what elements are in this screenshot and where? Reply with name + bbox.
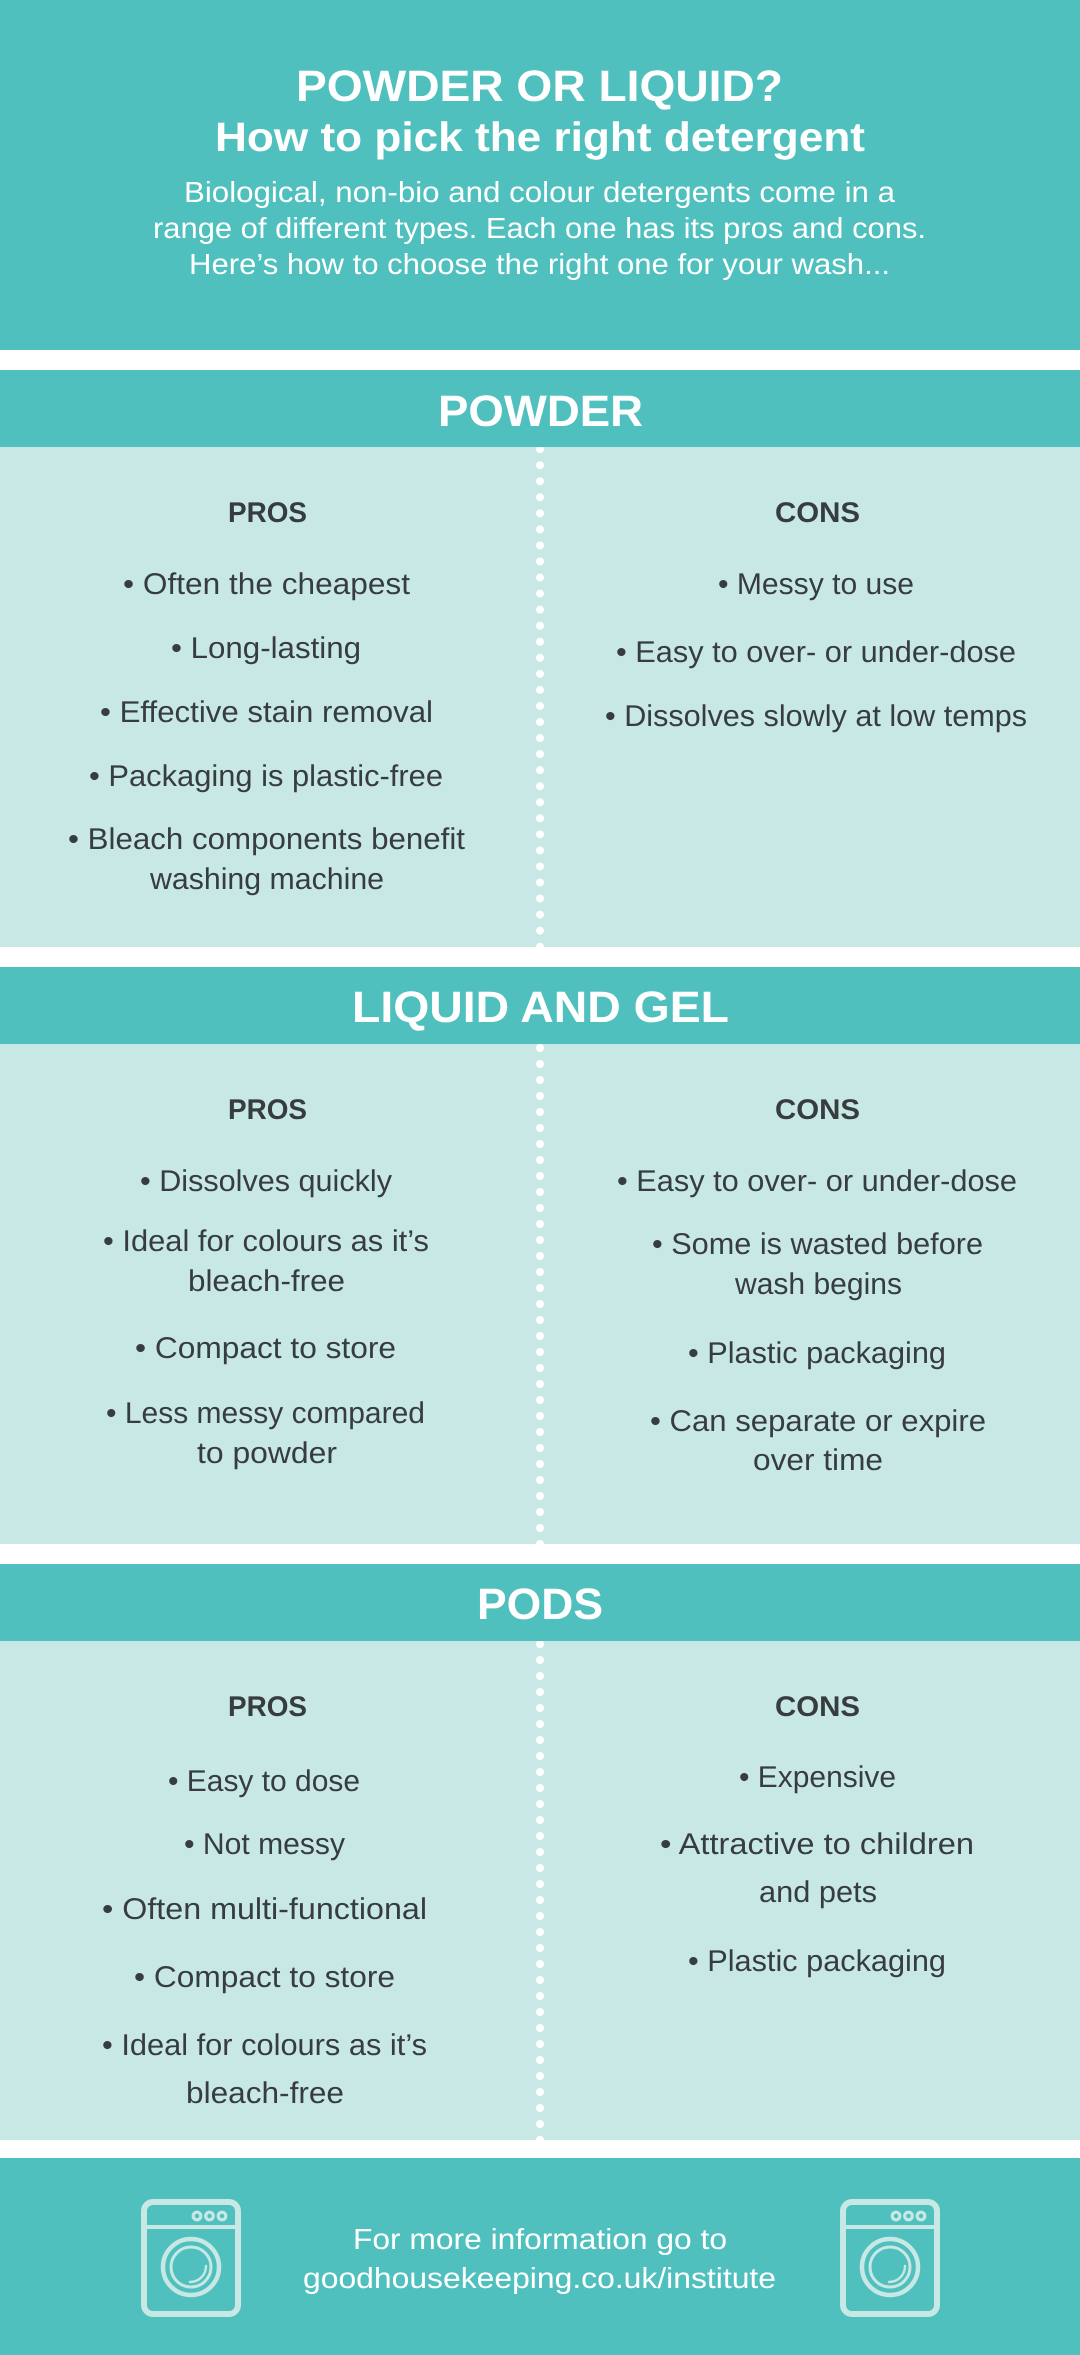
panel: liquid and gel — [0, 967, 1080, 1544]
powder cons list: • Dissolves slowly at low temps — [605, 700, 1027, 733]
pods cons list: • Expensive — [739, 1761, 896, 1794]
powder pros list: • Long-lasting — [171, 632, 361, 665]
powder pros list — [68, 497, 466, 896]
heading: powder — [0, 370, 1080, 447]
footer text: goodhousekeeping.co.uk/institute — [303, 2263, 776, 2295]
pods pros list: • Ideal for colours as it’s — [102, 2029, 427, 2062]
panel: header — [0, 0, 1080, 350]
liquid and gel pros list: • Dissolves quickly — [140, 1165, 392, 1198]
pods cons list: • Attractive to children — [660, 1828, 974, 1861]
liquid and gel pros list — [103, 1094, 429, 1470]
pods pros list: bleach-free — [186, 2077, 344, 2110]
panel: footer — [0, 2158, 1080, 2355]
liquid and gel cons list: • Some is wasted before — [652, 1228, 983, 1261]
powder pros list: • Effective stain removal — [100, 696, 433, 729]
powder pros list: • Packaging is plastic-free — [89, 760, 443, 793]
heading: liquid and gel — [0, 967, 1080, 1044]
title — [215, 62, 865, 160]
heading: powder: POWDER — [438, 387, 643, 436]
powder pros list: • Bleach components benefit — [68, 823, 466, 856]
icon: washing machine right — [843, 2202, 937, 2314]
pods pros list: • Easy to dose — [168, 1765, 360, 1798]
liquid and gel pros list: • Less messy compared — [106, 1397, 425, 1430]
powder pros list: washing machine — [149, 863, 384, 896]
panel: powder — [0, 370, 1080, 947]
pods cons list: CONS — [775, 1691, 860, 1723]
pods pros list: • Compact to store — [134, 1961, 395, 1994]
pods pros list: • Often multi-functional — [102, 1893, 427, 1926]
powder cons list: CONS — [775, 497, 860, 529]
liquid and gel pros list: PROS — [228, 1094, 307, 1126]
liquid and gel cons list: • Easy to over- or under-dose — [617, 1165, 1017, 1198]
liquid and gel pros list: bleach-free — [188, 1265, 345, 1298]
panel: pods — [0, 1564, 1080, 2140]
powder pros list: PROS — [228, 497, 307, 529]
liquid and gel cons list: over time — [753, 1444, 883, 1477]
liquid and gel cons list: CONS — [775, 1094, 860, 1126]
icon: washing machine left — [144, 2202, 238, 2314]
powder cons list: • Easy to over- or under-dose — [616, 636, 1016, 669]
liquid and gel cons list: wash begins — [734, 1268, 902, 1301]
liquid and gel cons list: • Can separate or expire — [650, 1405, 986, 1438]
intro text — [153, 177, 926, 281]
pods pros list — [102, 1691, 427, 2110]
powder pros list: • Often the cheapest — [123, 568, 411, 601]
intro text: range of different types. Each one has its pros and cons. — [153, 213, 926, 245]
heading: pods: PODS — [477, 1580, 603, 1629]
footer text: For more information go to — [353, 2224, 727, 2256]
title: POWDER OR LIQUID? — [296, 62, 783, 111]
pods cons list — [660, 1691, 974, 1978]
liquid and gel pros list: • Ideal for colours as it’s — [103, 1225, 429, 1258]
powder cons list — [605, 497, 1027, 733]
intro text: Here’s how to choose the right one for your wash... — [189, 249, 890, 281]
footer text — [303, 2224, 776, 2295]
powder cons list: • Messy to use — [718, 568, 914, 601]
liquid and gel cons list — [617, 1094, 1017, 1477]
title: How to pick the right detergent — [215, 114, 865, 160]
pods pros list: • Not messy — [184, 1828, 345, 1861]
liquid and gel cons list: • Plastic packaging — [688, 1337, 946, 1370]
pods cons list: and pets — [759, 1876, 877, 1909]
liquid and gel pros list: • Compact to store — [135, 1332, 396, 1365]
liquid and gel pros list: to powder — [197, 1437, 337, 1470]
heading: pods — [0, 1564, 1080, 1641]
pods pros list: PROS — [228, 1691, 307, 1723]
pods cons list: • Plastic packaging — [688, 1945, 946, 1978]
heading: liquid and gel: LIQUID AND GEL — [352, 983, 729, 1032]
intro text: Biological, non-bio and colour detergents come in a — [184, 177, 896, 209]
